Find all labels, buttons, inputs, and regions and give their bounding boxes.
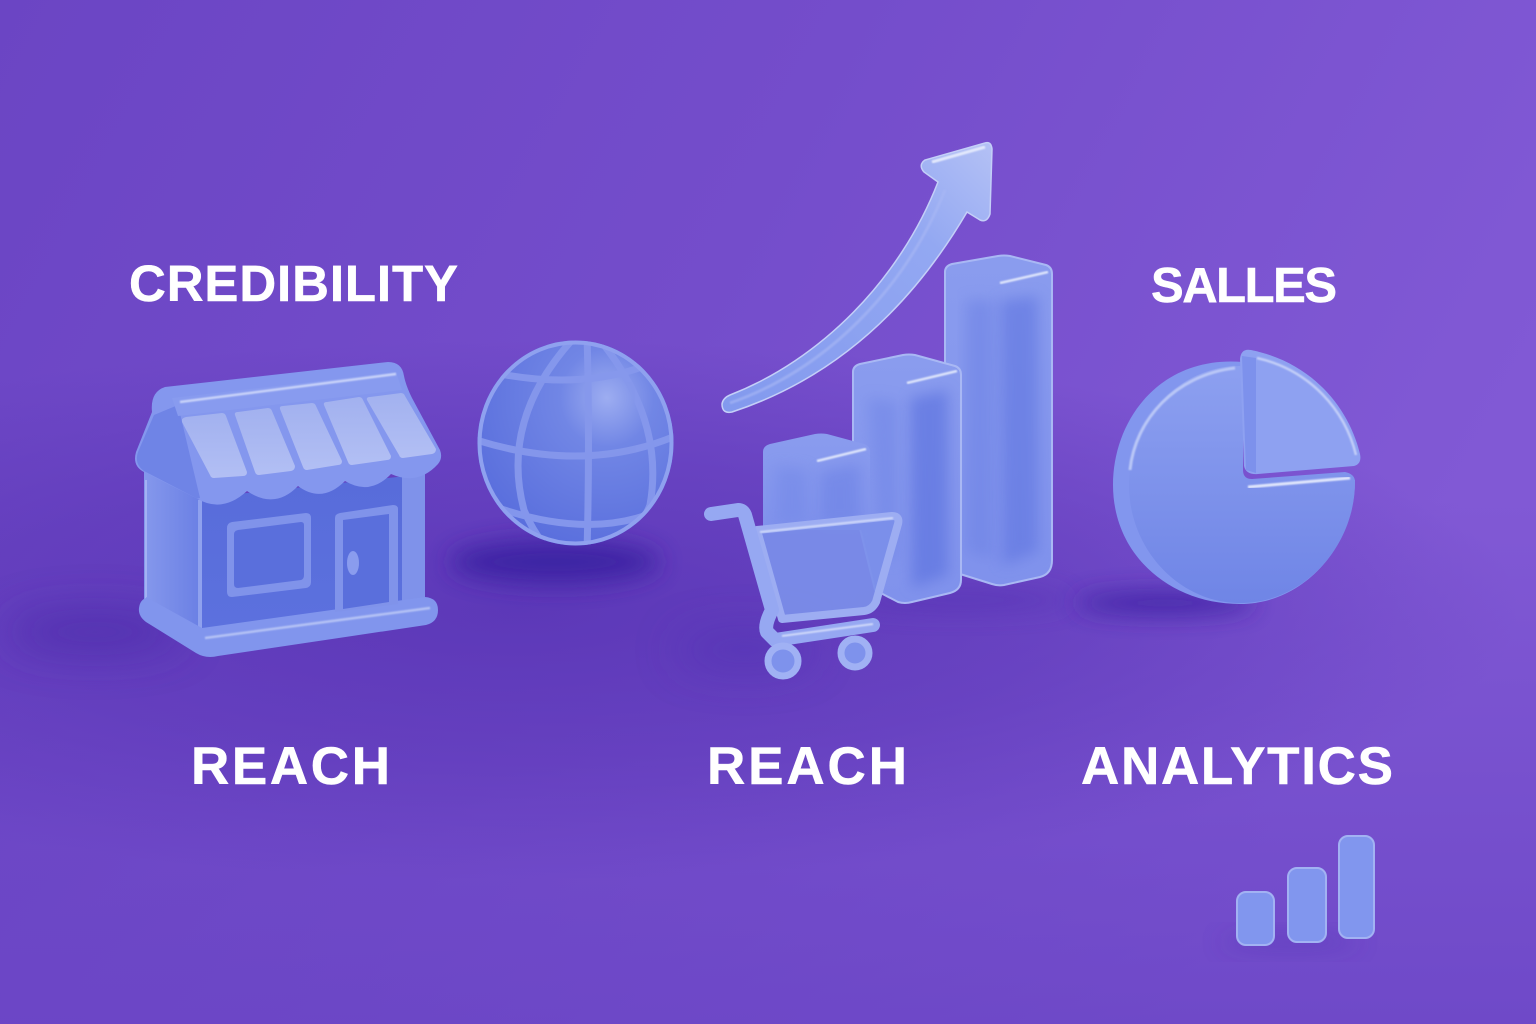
store window	[227, 513, 311, 597]
small bar 2	[1288, 868, 1326, 942]
heading: reach left: REACH	[191, 737, 390, 796]
icon: storefront	[135, 362, 441, 657]
tall bar	[945, 256, 1052, 585]
globe grid lines	[478, 340, 674, 546]
middle bar	[853, 354, 961, 603]
floor shadows	[5, 540, 1360, 947]
chart: 3d rising bars	[763, 256, 1052, 603]
cart handle and frame	[711, 510, 873, 640]
heading: analytics: ANALYTICS	[1081, 737, 1393, 796]
icon: shopping cart	[711, 510, 898, 676]
cart wheels	[768, 639, 869, 676]
chart: small analytics bars	[1237, 836, 1374, 945]
icon: growth arrow	[722, 143, 992, 412]
heading: reach centre: REACH	[707, 737, 907, 796]
pie disk edge	[1113, 361, 1355, 604]
store body	[144, 470, 202, 632]
small bar 3	[1339, 836, 1374, 938]
chart: pie	[1113, 350, 1360, 604]
pie slice	[1240, 350, 1360, 474]
heading: salles: SALLES	[1151, 259, 1337, 313]
awning stripes	[182, 393, 436, 478]
store base	[139, 597, 438, 657]
pie main face	[1129, 366, 1355, 603]
cart basket	[757, 516, 898, 619]
heading: credibility: CREDIBILITY	[129, 255, 458, 312]
small bar 1	[1237, 892, 1274, 945]
store door	[335, 505, 398, 612]
short bar	[763, 434, 870, 530]
store roof	[135, 362, 441, 505]
icon: globe	[478, 340, 674, 546]
